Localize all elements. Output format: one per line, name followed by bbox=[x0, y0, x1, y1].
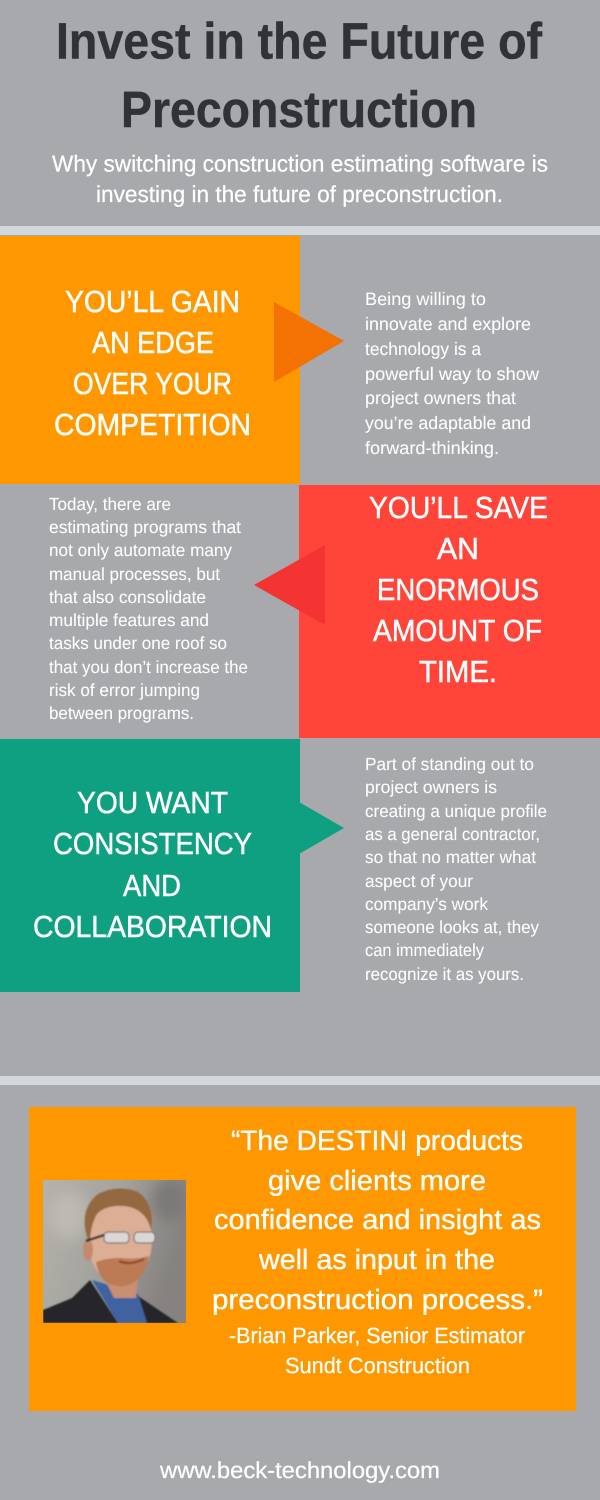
text: gain an edge description: powerful way to show bbox=[365, 364, 540, 384]
heading: save time: AN bbox=[437, 532, 479, 566]
text: consistency description: someone looks at, they bbox=[365, 917, 539, 937]
text: save time description bbox=[49, 494, 248, 723]
text: consistency description: can immediately bbox=[365, 940, 484, 960]
text: save time description: that you don’t increase the bbox=[49, 657, 248, 677]
text: save time description: Today, there are bbox=[49, 494, 171, 514]
text: consistency description: as a general contractor, bbox=[365, 824, 540, 844]
text: gain an edge description: project owners that bbox=[365, 388, 516, 408]
text: save time description: multiple features and bbox=[49, 610, 209, 630]
icon: orange arrow bbox=[274, 302, 344, 382]
panel: save time bbox=[49, 485, 600, 738]
text: consistency description: company’s work bbox=[365, 894, 488, 914]
heading: gain an edge: AN EDGE bbox=[92, 326, 214, 360]
text: gain an edge description: forward-thinking. bbox=[365, 438, 499, 458]
title bbox=[56, 12, 543, 138]
heading: consistency and collaboration: AND bbox=[123, 869, 181, 903]
quote: confidence and insight as bbox=[214, 1204, 541, 1235]
panel: consistency and collaboration bbox=[0, 739, 547, 992]
heading: gain an edge: OVER YOUR bbox=[73, 367, 232, 401]
attribution bbox=[229, 1323, 525, 1378]
heading: gain an edge bbox=[54, 285, 251, 442]
heading: consistency and collaboration bbox=[33, 786, 272, 944]
text: save time description: between programs. bbox=[49, 703, 194, 723]
text: save time description: not only automate many bbox=[49, 540, 232, 560]
text: consistency description: aspect of your bbox=[365, 871, 473, 891]
footer url: www.beck-technology.com bbox=[159, 1457, 440, 1483]
text: consistency description: Part of standing out to bbox=[365, 754, 534, 774]
title: Preconstruction bbox=[121, 81, 477, 138]
attribution: -Brian Parker, Senior Estimator bbox=[229, 1323, 525, 1348]
text: save time description: tasks under one roof so bbox=[49, 633, 227, 653]
text: save time description: estimating programs that bbox=[49, 517, 241, 537]
attribution: Sundt Construction bbox=[285, 1353, 470, 1378]
heading: save time: ENORMOUS bbox=[377, 573, 539, 607]
icon: green arrow bbox=[299, 802, 344, 854]
heading: consistency and collaboration: YOU WANT bbox=[77, 786, 228, 820]
heading: consistency and collaboration: COLLABORATION bbox=[33, 910, 272, 944]
text: consistency description: project owners is bbox=[365, 777, 497, 797]
heading: gain an edge: YOU’LL GAIN bbox=[65, 285, 240, 319]
text: gain an edge description: Being willing to bbox=[365, 289, 486, 309]
text: save time description: manual processes, but bbox=[49, 564, 220, 584]
text: consistency description: so that no matter what bbox=[365, 847, 536, 867]
text: gain an edge description: technology is a bbox=[365, 339, 482, 359]
text: save time description: risk of error jumping bbox=[49, 680, 200, 700]
quote: “The DESTINI products bbox=[231, 1125, 523, 1156]
text: consistency description: recognize it as yours. bbox=[365, 964, 524, 984]
heading: consistency and collaboration: CONSISTENCY bbox=[53, 827, 252, 861]
subtitle: investing in the future of preconstruction. bbox=[96, 181, 503, 207]
heading: save time: TIME. bbox=[419, 655, 497, 689]
quote: preconstruction process.” bbox=[212, 1284, 543, 1315]
text: gain an edge description bbox=[365, 289, 540, 458]
heading: save time: AMOUNT OF bbox=[373, 614, 542, 648]
text: consistency description bbox=[365, 754, 547, 984]
panel: gain an edge bbox=[0, 236, 540, 484]
text: consistency description: creating a unique profile bbox=[365, 801, 547, 821]
text: save time description: that also consolidate bbox=[49, 587, 206, 607]
title: Invest in the Future of bbox=[56, 12, 543, 70]
quote bbox=[212, 1125, 543, 1315]
heading: save time: YOU’LL SAVE bbox=[369, 491, 548, 525]
icon: red arrow bbox=[254, 545, 325, 625]
text: gain an edge description: innovate and explore bbox=[365, 314, 531, 334]
photo: Brian Parker portrait bbox=[43, 1178, 188, 1323]
heading: save time bbox=[369, 491, 548, 689]
panel: testimonial bbox=[29, 1107, 576, 1411]
quote: well as input in the bbox=[258, 1244, 495, 1275]
heading: gain an edge: COMPETITION bbox=[54, 408, 251, 442]
text: gain an edge description: you’re adaptable and bbox=[365, 413, 531, 433]
subtitle: Why switching construction estimating software is bbox=[52, 150, 548, 176]
quote: give clients more bbox=[268, 1165, 486, 1196]
subtitle bbox=[52, 150, 548, 207]
